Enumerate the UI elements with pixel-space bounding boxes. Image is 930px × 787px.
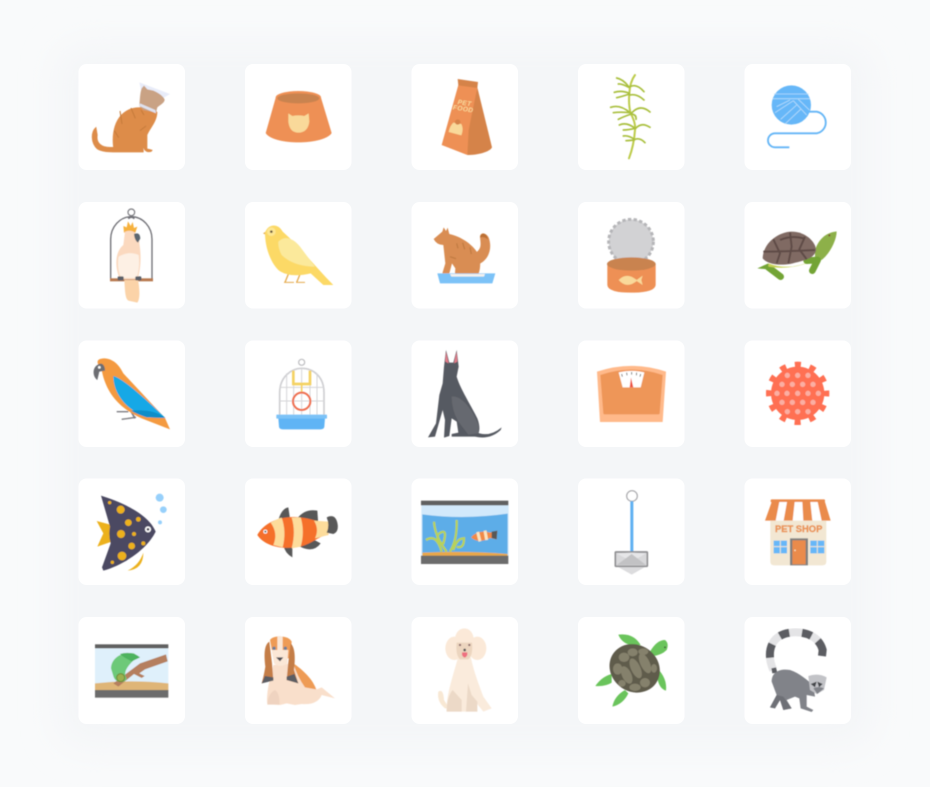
icon: doberman (428, 350, 502, 438)
icon: litter scoop (615, 491, 647, 575)
icon: cat in litter box (434, 227, 495, 283)
icon: ball of yarn (768, 85, 826, 147)
icon: clownfish (257, 507, 338, 557)
icon: parrot in cage (110, 209, 153, 303)
icon: pet food bag: PET (457, 99, 472, 108)
icon: canary (263, 226, 333, 285)
icon: ring-tailed lemur (770, 632, 827, 712)
icon: pet food bag (442, 79, 492, 155)
icon: chameleon terrarium (95, 644, 168, 698)
icon: tortoise (757, 231, 837, 277)
icon: cat with cone collar (92, 82, 170, 152)
icon: pet food bowl (266, 91, 332, 142)
icon: sea turtle (595, 634, 669, 707)
icon: pet shop building (765, 499, 831, 565)
icon: bathroom scale (597, 366, 666, 422)
icon: bird cage (276, 359, 327, 429)
icon: angelfish (97, 494, 167, 571)
icon: spiked toy ball (769, 365, 826, 422)
icon: aquatic plant (611, 75, 650, 158)
icon: open tin can (607, 219, 656, 293)
icon: pet shop building: PET SHOP (775, 524, 822, 534)
icon: basset hound (262, 636, 335, 705)
icon: aquarium tank (421, 501, 509, 564)
icon: pet food bag: FOOD (452, 104, 474, 115)
icon: macaw (94, 358, 170, 429)
icon: poodle (438, 628, 492, 712)
